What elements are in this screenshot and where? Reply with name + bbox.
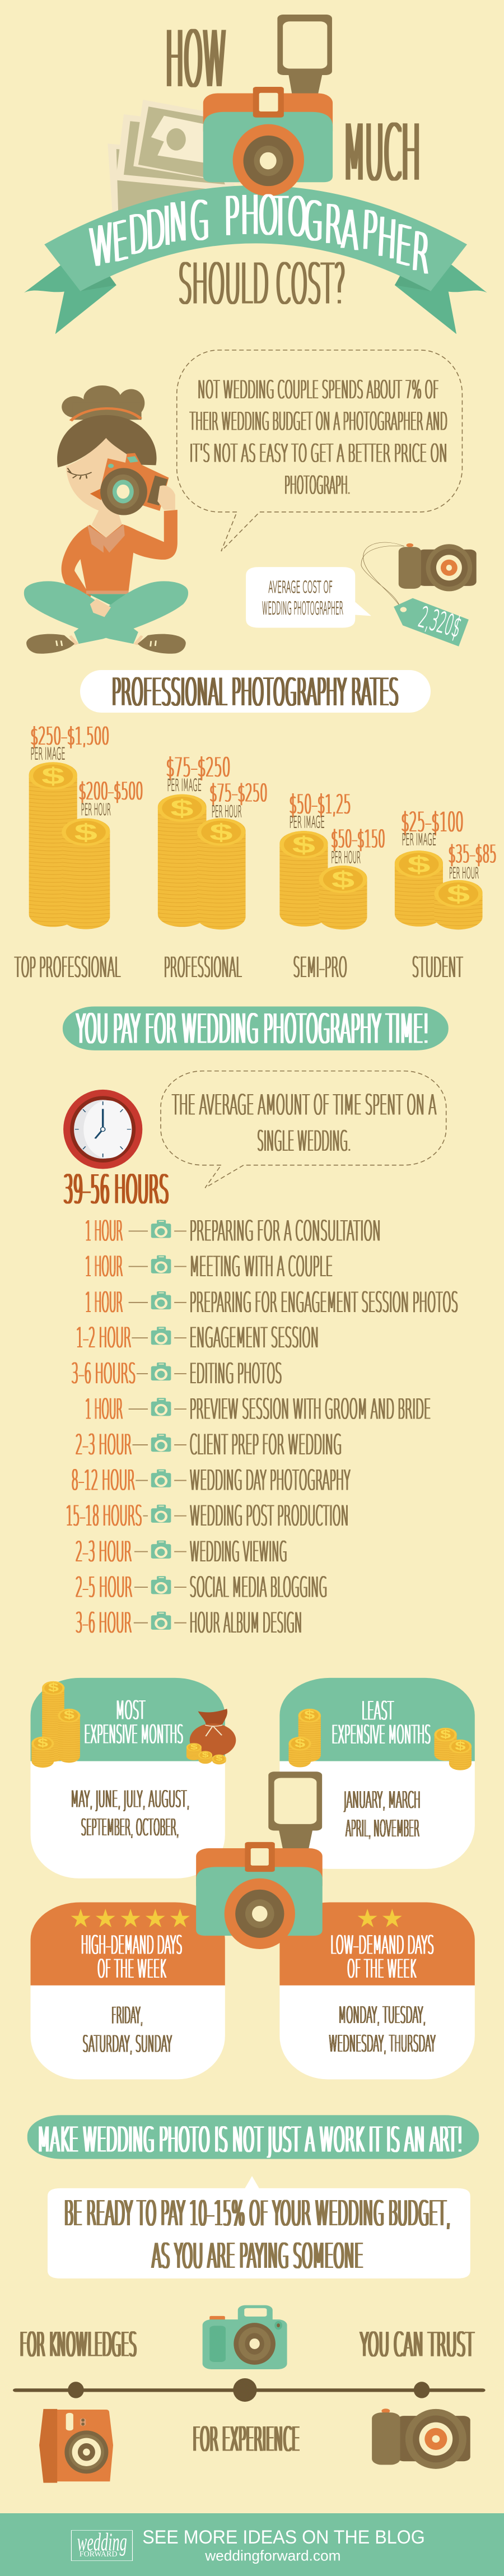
icon: coin stacks: $ (38, 1737, 48, 1750)
row: album design: 3–6 HOUR (76, 1607, 132, 1639)
text: EXPENSIVE MONTHS (84, 1719, 183, 1749)
panel: low-demand days (279, 1902, 475, 2080)
column: professional: PER IMAGE (167, 776, 202, 794)
time section: tier labels, heading, clock and bubble (15, 951, 463, 1213)
icon: coin stacks: $ (455, 1740, 466, 1752)
icon: coin stacks: $ (295, 1737, 305, 1750)
text: OF THE WEEK (97, 1954, 166, 1984)
intro section: girl with camera and speech bubble: AVERAGE COST OF (268, 578, 333, 597)
time section: tier labels, heading, clock and bubble: 39–56 HOURS (64, 1167, 169, 1213)
icon: coin stacks (31, 1681, 81, 1768)
row: preparing engagement photos (85, 1286, 458, 1319)
callout: average cost (246, 567, 371, 627)
column: professional: $ (170, 795, 194, 821)
column: top professional: PER IMAGE (31, 745, 66, 764)
illustration: girl with camera (24, 385, 188, 654)
column: semi-pro: $ (332, 866, 354, 892)
footer: wedding (77, 2528, 127, 2556)
column: semi-pro: $ (292, 832, 315, 858)
row: meeting (85, 1250, 333, 1283)
footer url: weddingforward.com (204, 2548, 340, 2564)
intro section: girl with camera and speech bubble (24, 350, 477, 654)
logo: wedding forward: FORWARD (80, 2550, 118, 2558)
chart: coin stacks of rates: PER HOUR (331, 848, 361, 867)
title: WEDDING PHOTOGRAPHER on ribbon: WEDDING PHOTOGRAPHER (88, 184, 431, 287)
callout: budget advice (48, 2176, 470, 2279)
text: SATURDAY, SUNDAY (83, 2031, 172, 2058)
tier labels under coin stacks: PROFESSIONAL (164, 951, 242, 984)
art section (27, 2115, 479, 2279)
icon: coin stacks: $ (304, 1709, 315, 1722)
tier labels under coin stacks: TOP PROFESSIONAL (15, 951, 120, 984)
panel: least expensive months (279, 1678, 475, 1869)
column: student: $ (407, 852, 431, 877)
time breakdown list (66, 1215, 458, 1639)
icon: central camera (196, 1771, 323, 1949)
icon: coin stacks: $ (440, 1728, 451, 1741)
column: professional (158, 752, 268, 929)
timeline (13, 2378, 486, 2402)
icon: brown camera with price tag (361, 542, 477, 647)
logo: wedding forward (71, 2528, 132, 2561)
row: wedding day: 8–12 HOUR (71, 1464, 135, 1497)
column: top professional: $ (41, 763, 64, 789)
icon: header camera (203, 15, 333, 196)
panel: most expensive months: MOST (116, 1696, 145, 1726)
timeline section: reasons with cameras (13, 2305, 486, 2483)
chart: coin stacks of rates: $75–$250 (209, 779, 268, 808)
column: semi-pro: PER IMAGE (290, 813, 325, 831)
column: student: $ (447, 881, 470, 907)
panel: most expensive months (31, 1678, 236, 1878)
chart: coin stacks of rates: $75–$250 (166, 752, 231, 783)
chart: coin stacks of rates: $200–$500 (79, 778, 143, 805)
speech bubble: average time (161, 1071, 446, 1188)
icon: coin stacks (288, 1709, 472, 1770)
row: client prep: 2–3 HOUR (76, 1429, 132, 1461)
icon: money bag: $ (190, 1743, 198, 1751)
panel: least expensive months: LEAST (362, 1696, 394, 1726)
column: professional: $ (209, 819, 233, 845)
footer (0, 2513, 504, 2576)
chart: coin stacks of rates: PER HOUR (212, 802, 242, 821)
row: preparing engagement photos: 1 HOUR (85, 1286, 123, 1319)
icon: coin stacks: $ (48, 1681, 59, 1694)
icon: two stars (358, 1909, 402, 1927)
icon: ribbon tails (24, 265, 487, 334)
chart: coin stacks of rates: $250–$1,500 (31, 722, 109, 751)
header: title with camera and ribbon: HOW (166, 15, 227, 105)
row: meeting: 1 HOUR (85, 1250, 123, 1283)
icon: coin stacks: $ (64, 1709, 74, 1722)
row: social media: 2–5 HOUR (76, 1571, 132, 1603)
chart: coin stacks of rates: PER HOUR (81, 801, 111, 819)
icon: orange instant camera (39, 2409, 113, 2483)
row: preview: 1 HOUR (85, 1393, 123, 1425)
row: consultation: 1 HOUR (85, 1215, 123, 1247)
panel: high-demand days (31, 1902, 225, 2080)
icon: money bag: $ (202, 1751, 209, 1759)
icon: brown camera (372, 2408, 470, 2469)
icon: five stars (71, 1909, 190, 1927)
icon: ribbon band (44, 185, 467, 291)
column: semi-pro (279, 789, 385, 929)
speech bubble: budget share (177, 350, 462, 551)
column: top professional: $ (74, 819, 97, 845)
column: student (395, 807, 497, 929)
icon: money bills (108, 100, 241, 215)
chart: coin stacks of rates (29, 722, 497, 929)
header: title with camera and ribbon (24, 15, 487, 334)
row: consultation (85, 1215, 381, 1247)
tier labels under coin stacks: SEMI–PRO (293, 951, 347, 984)
row: viewing: 2–3 HOUR (76, 1536, 132, 1568)
row: preview (85, 1393, 431, 1425)
row: post production: 15–18 HOURS (66, 1500, 142, 1532)
column: top professional (29, 722, 143, 929)
icon: money bag: $ (216, 1754, 223, 1763)
panel: high-demand days: FRIDAY, (111, 2002, 143, 2029)
icon: teal camera (203, 2305, 287, 2369)
row: editing: 3–6 HOURS (71, 1357, 136, 1390)
icon: money bag (186, 1709, 236, 1764)
row: engagement session: 1–2 HOUR (76, 1322, 131, 1354)
icon: clock (63, 1090, 142, 1169)
